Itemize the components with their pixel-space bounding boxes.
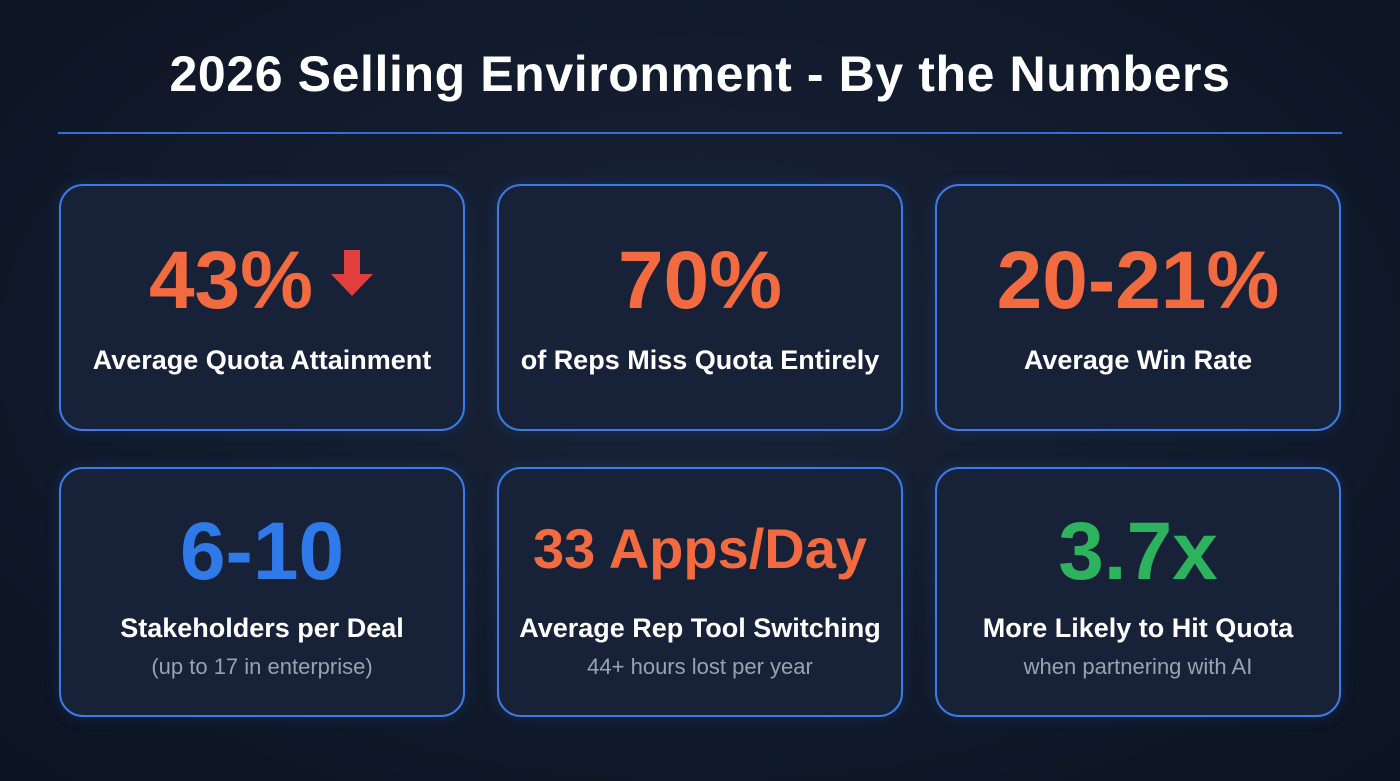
card: quota attainment xyxy=(59,184,465,431)
stat: 3.7x xyxy=(1058,506,1218,597)
label: More Likely to Hit Quota xyxy=(983,613,1293,643)
card: reps miss quota xyxy=(497,184,903,431)
stat: 70% xyxy=(618,235,782,326)
sub: 44+ hours lost per year xyxy=(587,654,813,679)
sub: when partnering with AI xyxy=(1024,654,1252,679)
stat: 43% with down arrow: 43% xyxy=(149,235,313,326)
stat: 33 Apps/Day xyxy=(533,517,867,580)
card: stakeholders xyxy=(59,467,465,717)
label: Average Win Rate xyxy=(1024,345,1252,375)
card: tool switching xyxy=(497,467,903,717)
card: AI xyxy=(935,467,1341,717)
label: Stakeholders per Deal xyxy=(120,613,404,643)
label: Average Quota Attainment xyxy=(93,345,431,375)
stat: 6-10 xyxy=(180,506,344,597)
sub: (up to 17 in enterprise) xyxy=(151,654,373,679)
label: of Reps Miss Quota Entirely xyxy=(521,345,879,375)
label: Average Rep Tool Switching xyxy=(519,613,881,643)
card: win rate xyxy=(935,184,1341,431)
title: 2026 Selling Environment - By the Numbers xyxy=(170,46,1230,102)
stat: 20-21% xyxy=(997,235,1279,326)
